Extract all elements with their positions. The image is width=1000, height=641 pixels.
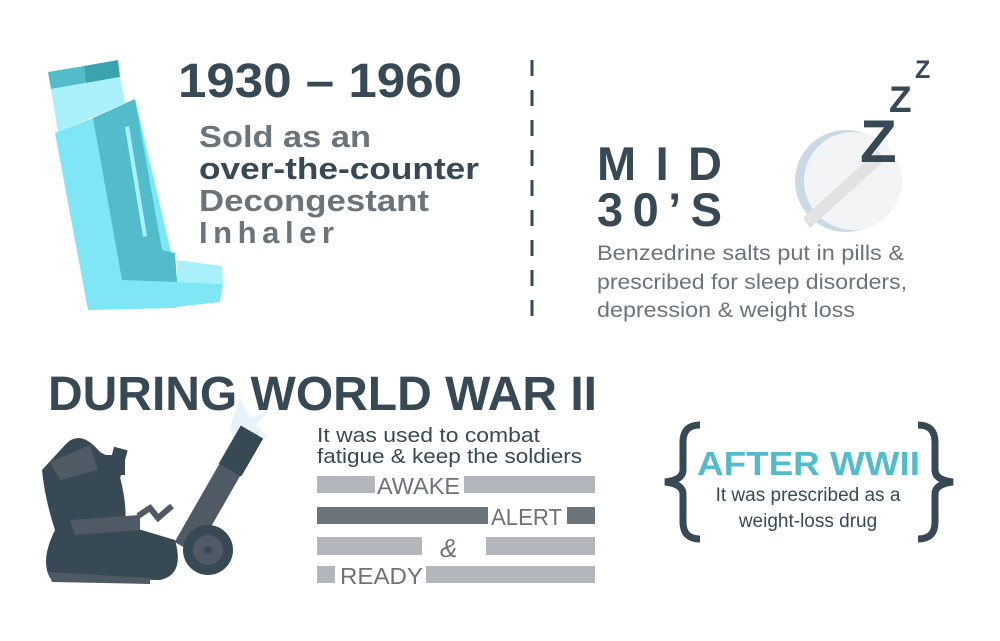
bars: awake alert ready: &: [440, 533, 457, 563]
icon: pill with zzz: Z: [889, 79, 912, 120]
icon: pill with zzz: [795, 56, 930, 232]
heading: mid 30's: 30’S: [597, 183, 722, 236]
heading: mid 30's: [597, 137, 722, 236]
heading: mid 30's: MID: [597, 137, 722, 190]
callout: after wwii: AFTER WWII: [697, 445, 920, 482]
bars: awake alert ready: AWAKE: [377, 473, 460, 499]
text block: benzedrine: depression & weight loss: [597, 299, 855, 322]
icon: soldier with mortar: [42, 398, 270, 584]
bars: awake alert ready: ALERT: [491, 504, 562, 530]
callout: after wwii: It was prescribed as a: [716, 485, 901, 506]
icon: pill with zzz: Z: [915, 56, 930, 84]
text block: combat fatigue: [317, 425, 582, 468]
callout: after wwii: weight-loss drug: [738, 511, 877, 532]
text block: benzedrine: prescribed for sleep disorders,: [597, 271, 907, 294]
icon: inhaler: [48, 60, 223, 310]
text block: inhaler description: Decongestant: [199, 183, 429, 218]
text block: inhaler description: Sold as an: [199, 119, 371, 154]
callout: after wwii: [665, 425, 953, 539]
text block: benzedrine: [597, 242, 907, 322]
text block: inhaler description: over-the-counter: [199, 151, 479, 186]
text block: combat fatigue: fatigue & keep the soldiers: [317, 446, 582, 468]
text block: inhaler description: [199, 119, 479, 250]
text block: combat fatigue: It was used to combat: [317, 425, 541, 447]
bars: awake alert ready: READY: [340, 563, 423, 589]
icon: pill with zzz: Z: [860, 108, 897, 175]
text block: inhaler description: Inhaler: [199, 215, 334, 250]
heading: 1930 – 1960: 1930 – 1960: [178, 55, 462, 108]
text block: benzedrine: Benzedrine salts put in pills &: [597, 242, 904, 265]
bars: awake alert ready: [317, 473, 595, 589]
heading: during world war ii: DURING WORLD WAR II: [48, 368, 597, 421]
